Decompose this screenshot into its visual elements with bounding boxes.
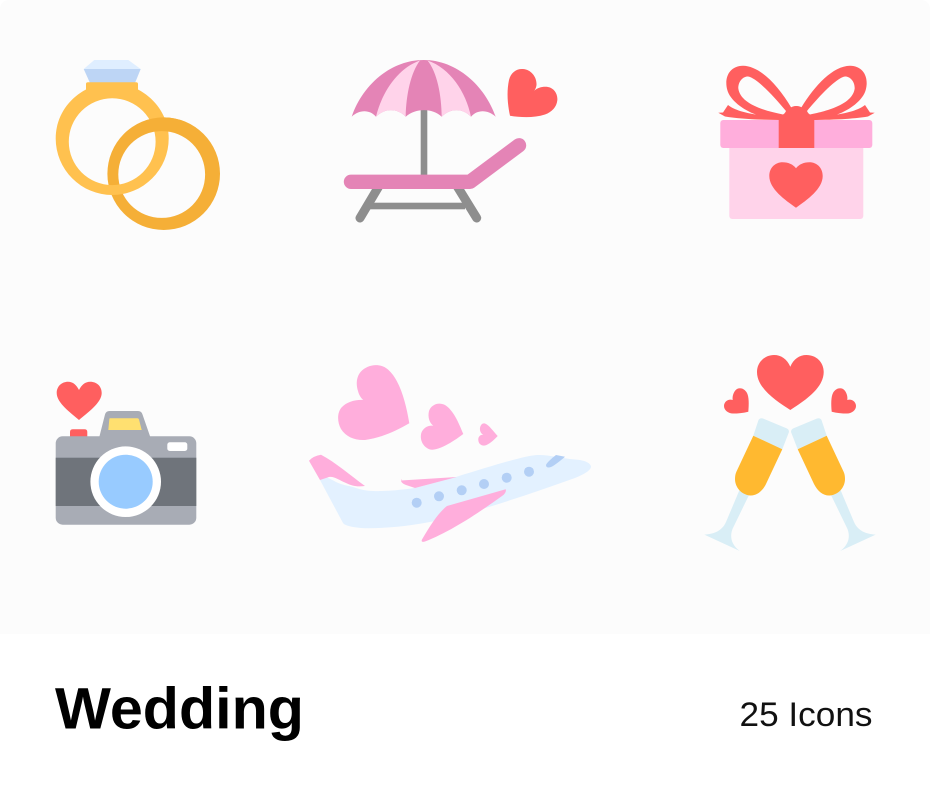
umbrella light stripes: [376, 60, 420, 117]
second ring: [107, 117, 220, 230]
first ring: [56, 82, 169, 195]
tail fin: [309, 455, 365, 486]
umbrella pole: [421, 108, 427, 178]
fuselage: [320, 455, 591, 528]
icon: honeymoon plane with hearts: [309, 365, 591, 542]
icon: gift box: [718, 66, 875, 219]
large heart: [757, 355, 824, 410]
glass rim: [753, 418, 789, 449]
front wing: [422, 489, 506, 542]
body: [56, 436, 196, 525]
large heart: [338, 365, 409, 440]
left heart: [724, 388, 749, 414]
icon: camera: [56, 382, 196, 525]
lounger legs: [360, 186, 477, 218]
lounger seat: [351, 145, 519, 182]
icon: beach lounger with umbrella: [351, 60, 557, 218]
diamond: [84, 60, 141, 83]
title: Wedding: [55, 676, 304, 742]
shutter button: [70, 429, 87, 437]
icon: wedding rings: [56, 60, 220, 230]
windows: [412, 467, 534, 508]
white indicator: [167, 442, 187, 451]
cockpit window: [546, 455, 565, 467]
ribbon and knot: [779, 106, 814, 148]
box body: [729, 140, 863, 219]
dark band: [56, 458, 196, 506]
right flute: [791, 418, 876, 551]
right heart: [831, 388, 856, 414]
icon count: 25 Icons: [740, 696, 872, 734]
champagne: [735, 436, 782, 496]
heart: [769, 162, 823, 208]
stem and foot: [704, 490, 749, 551]
viewfinder housing: [99, 411, 150, 437]
lid: [720, 120, 872, 148]
heart: [508, 69, 557, 117]
umbrella canopy: [352, 60, 496, 117]
lens: [90, 446, 161, 517]
small heart: [478, 423, 498, 446]
flash: [108, 418, 142, 430]
ring overlap: [145, 117, 184, 132]
heart: [57, 382, 102, 420]
icon: champagne toast: [704, 355, 876, 551]
rear wing: [401, 477, 457, 488]
medium heart: [421, 404, 463, 450]
infographic canvas: [55, 60, 876, 741]
bow: [718, 66, 875, 120]
left flute: [704, 418, 789, 551]
